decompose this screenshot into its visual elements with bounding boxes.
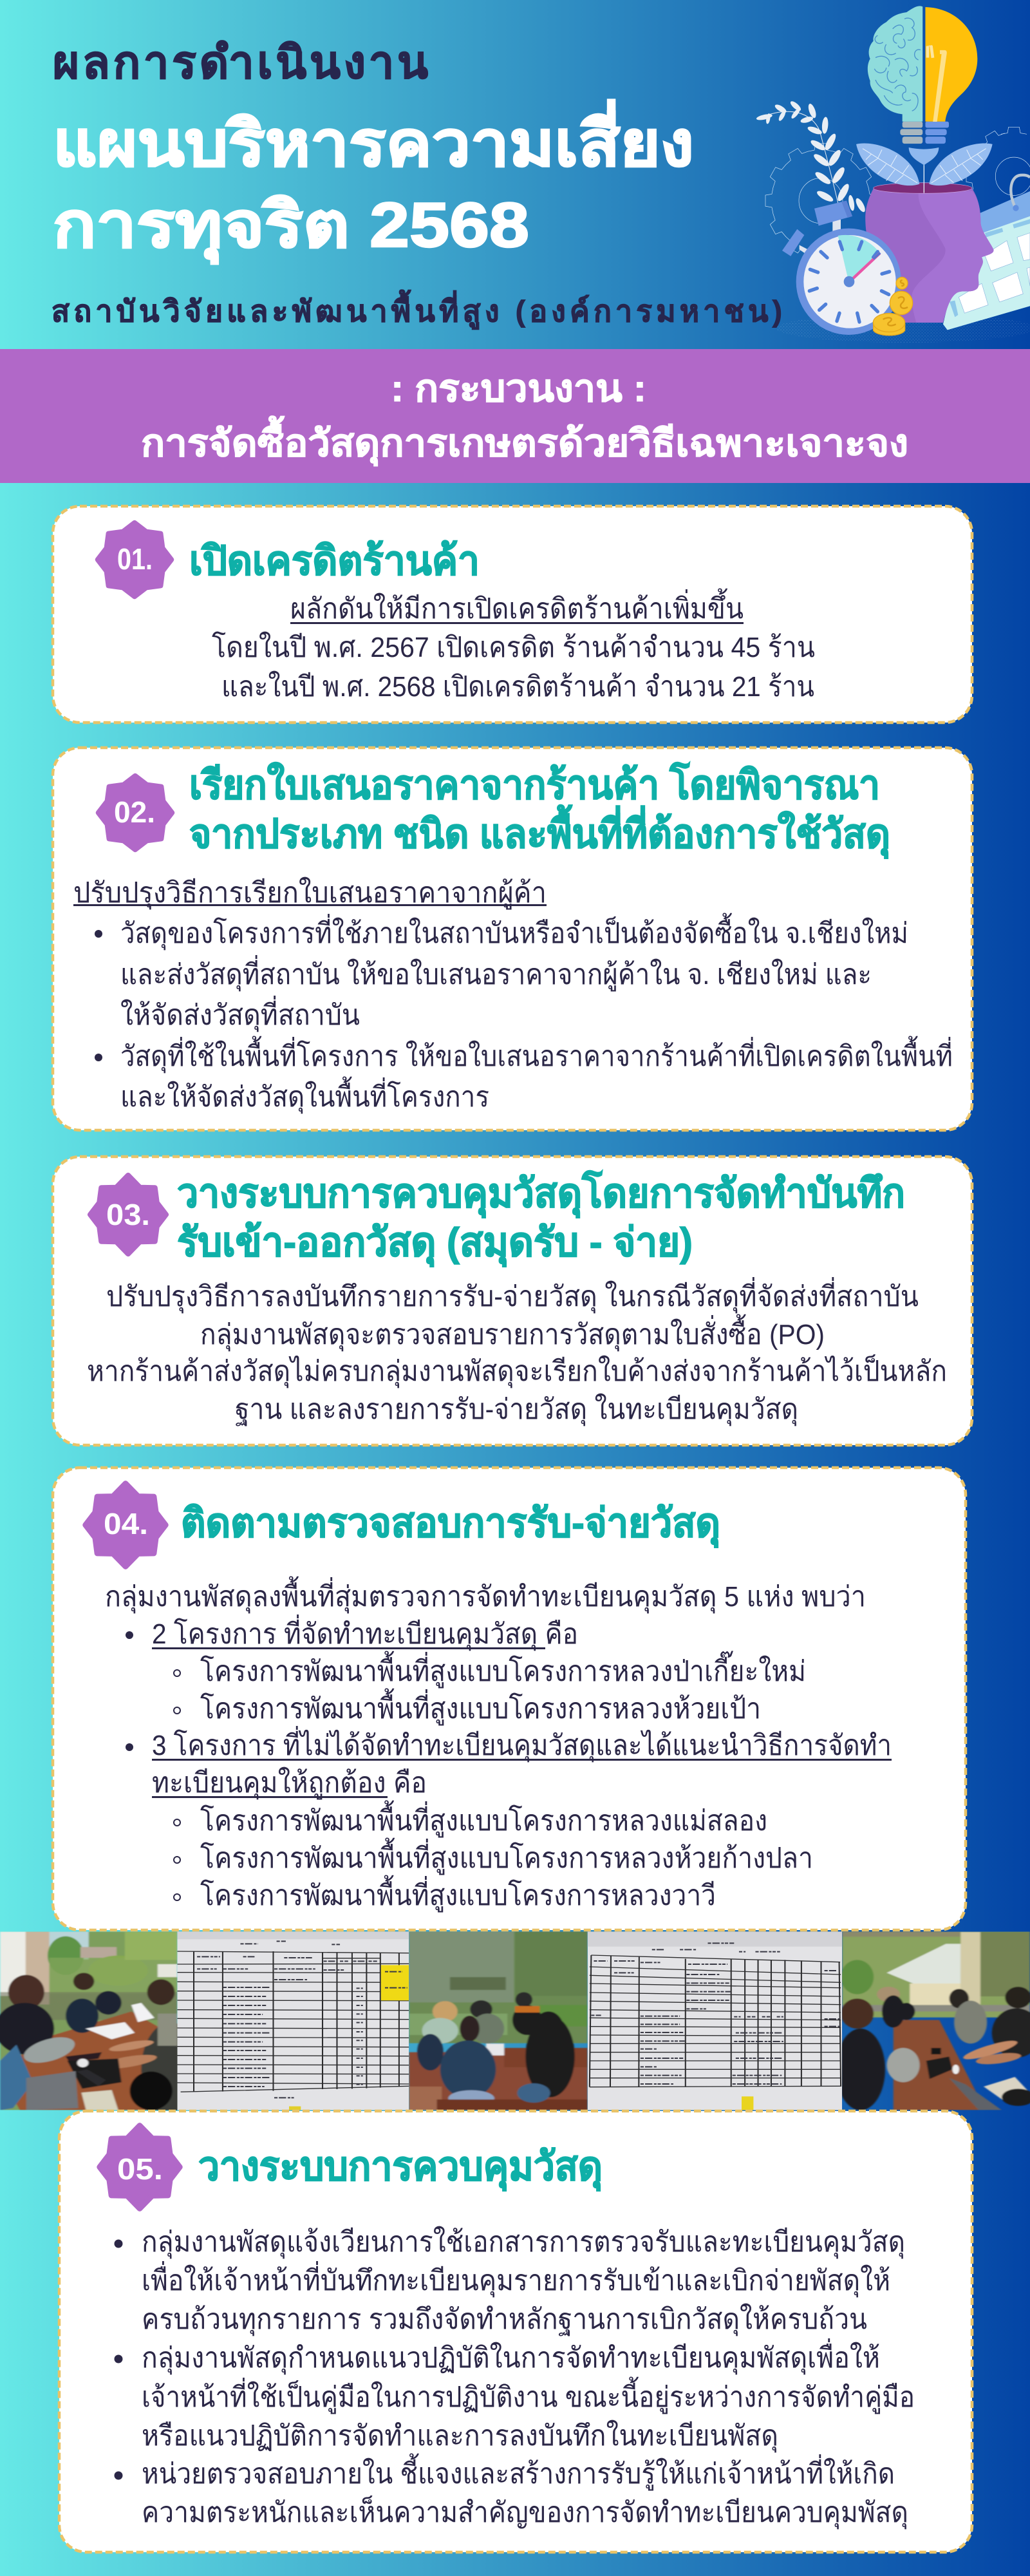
card 02 bullet list: ให้จัดส่งวัสดุที่สถาบัน (120, 995, 360, 1032)
card 02 bullet list: วัสดุของโครงการที่ใช้ภายในสถาบันหรือจำเป็นต้องจัดซื้อใน จ.เชียงใหม่ (120, 913, 908, 951)
card 04 list: 3 projects: โครงการพัฒนาพื้นที่สูงแบบโครงการหลวงวาวี (200, 1875, 716, 1913)
card 03 background (53, 1157, 972, 1445)
icon: leaves (856, 144, 993, 193)
card 02 background (53, 748, 972, 1130)
icon: lightbulb half (925, 7, 977, 122)
panel: 04 (53, 1468, 966, 1930)
photo: handwritten register sheet (178, 1931, 409, 2110)
card 04 list: 3 projects: 3 โครงการ ที่ไม่ได้จัดทำทะเบียนคุมวัสดุและได้แนะนำวิธีการจัดทำ (152, 1725, 892, 1763)
card 05 bullet list: เพื่อให้เจ้าหน้าที่บันทึกทะเบียนคุมรายการรับเข้าและเบิกจ่ายพัสดุให้ (142, 2260, 890, 2298)
badge 02 number: 02. (114, 795, 155, 829)
card 05 bullet list: ความตระหนักและเห็นความสำคัญของการจัดทำทะเบียนควบคุมพัสดุ (142, 2496, 908, 2530)
icon: coins (873, 277, 913, 336)
card 03 body (87, 1276, 947, 1426)
card 02 heading: เรียกใบเสนอราคาจากร้านค้า โดยพิจารณา (189, 761, 880, 808)
card 03 heading: รับเข้า-ออกวัสดุ (สมุดรับ - จ่าย) (177, 1220, 693, 1267)
illustration: brain bulb, head, clock, calendar (756, 6, 1030, 343)
card 01 body (212, 588, 815, 703)
badge 01 (98, 523, 171, 596)
card 01 body: ผลักดันให้มีการเปิดเครดิตร้านค้าเพิ่มขึ้น (290, 588, 744, 625)
card 01 body: และในปี พ.ศ. 2568 เปิดเครดิตร้านค้า จำนวน 21 ร้าน (221, 670, 814, 703)
card 03 body: ปรับปรุงวิธีการลงบันทึกรายการรับ-จ่ายวัสดุ ในกรณีวัสดุที่จัดส่งที่สถาบัน (106, 1276, 919, 1314)
card 01 background (53, 506, 972, 723)
card 02 bullet list: และให้จัดส่งวัสดุในพื้นที่โครงการ (120, 1076, 489, 1114)
icon: left gear (765, 144, 876, 257)
card 05 bullet list (115, 2226, 915, 2530)
panel: 02 (53, 748, 972, 1130)
card 05 bullet list: หน่วยตรวจสอบภายใน ชี้แจงและสร้างการรับรู้ให้แก่เจ้าหน้าที่ให้เกิด (142, 2453, 895, 2491)
band heading: : กระบวนงาน : (391, 368, 646, 410)
card 04 list: 2 projects (126, 1614, 806, 1726)
card 05 background (59, 2111, 972, 2552)
photo strip (0, 1931, 1030, 2117)
icon: right gear (966, 127, 1030, 195)
card 04 list: 3 projects (126, 1725, 892, 1913)
icon: plant branch (756, 100, 867, 213)
band: process title (0, 349, 1030, 483)
badge 04 (86, 1484, 165, 1566)
card 05 bullet list: เจ้าหน้าที่ใช้เป็นคู่มือในการปฏิบัติงาน ขณะนี้อยู่ระหว่างการจัดทำคู่มือ (142, 2376, 915, 2414)
card 01 heading: เปิดเครดิตร้านค้า (189, 539, 480, 583)
card 04 background (53, 1468, 966, 1930)
card 04 list: 2 projects: 2 โครงการ ที่จัดทำทะเบียนคุมวัสดุ คือ (152, 1614, 578, 1651)
card 03 heading (177, 1170, 905, 1267)
photo: meeting at table (0, 1931, 178, 2110)
card 02 bullet list (95, 913, 953, 1114)
icon: bulb screw base (900, 122, 949, 144)
header titles (52, 37, 782, 330)
card 03 body: หากร้านค้าส่งวัสดุไม่ครบกลุ่มงานพัสดุจะเรียกใบค้างส่งจากร้านค้าไว้เป็นหลัก (87, 1354, 947, 1388)
card 04 list: 3 projects: โครงการพัฒนาพื้นที่สูงแบบโครงการหลวงแม่สลอง (200, 1800, 767, 1838)
icon: purple head (865, 183, 993, 323)
card 02 bullet list: และส่งวัสดุที่สถาบัน ให้ขอใบเสนอราคาจากผู้ค้าใน จ. เชียงใหม่ และ (120, 954, 872, 992)
card 04 list: 2 projects: โครงการพัฒนาพื้นที่สูงแบบโครงการหลวงป่าเกี๊ยะใหม่ (200, 1651, 806, 1689)
badge 02 (98, 776, 172, 849)
card 03 body: กลุ่มงานพัสดุจะตรวจสอบรายการวัสดุตามใบสั่งซื้อ (PO) (200, 1314, 825, 1352)
card 04 list: 2 projects: โครงการพัฒนาพื้นที่สูงแบบโครงการหลวงห้วยเป้า (200, 1688, 761, 1726)
photo: handwritten register sheet 2 (588, 1931, 842, 2110)
card 01 body: โดยในปี พ.ศ. 2567 เปิดเครดิต ร้านค้าจำนวน 45 ร้าน (212, 631, 815, 663)
main title line 2: การทุจริต 2568 (53, 189, 529, 265)
icon: calendar (943, 175, 1030, 330)
icon: stopwatch (782, 201, 901, 335)
icon: brain half (868, 6, 925, 146)
photo: meeting under shelter (836, 1931, 1030, 2110)
card 02 subhead: ปรับปรุงวิธีการเรียกใบเสนอราคาจากผู้ค้า (73, 876, 547, 910)
card 05 bullet list: ครบถ้วนทุกรายการ รวมถึงจัดทำหลักฐานการเบิกวัสดุให้ครบถ้วน (142, 2303, 867, 2336)
band background (0, 349, 1030, 483)
card 05 bullet list: กลุ่มงานพัสดุกำหนดแนวปฏิบัติในการจัดทำทะเบียนคุมพัสดุเพื่อให้ (142, 2338, 880, 2375)
band subheading: การจัดซื้อวัสดุการเกษตรด้วยวิธีเฉพาะเจาะจง (141, 416, 908, 467)
badge 01 number: 01. (117, 542, 153, 576)
card 05 bullet list: หรือแนวปฏิบัติการจัดทำและการลงบันทึกในทะเบียนพัสดุ (142, 2420, 778, 2453)
badge 03 number: 03. (106, 1198, 150, 1231)
card 03 heading: วางระบบการควบคุมวัสดุโดยการจัดทำบันทึก (177, 1170, 905, 1218)
card 04 intro: กลุ่มงานพัสดุลงพื้นที่สุ่มตรวจการจัดทำทะเบียนคุมวัสดุ 5 แห่ง พบว่า (105, 1576, 866, 1614)
card 03 body: ฐาน และลงรายการรับ-จ่ายวัสดุ ในทะเบียนคุมวัสดุ (235, 1393, 798, 1426)
panel: 05 (59, 2111, 972, 2552)
main title line 1: แผนบริหารความเสี่ยง (53, 99, 694, 179)
badge 04 number: 04. (104, 1507, 148, 1540)
icon: ground dots (778, 317, 1030, 343)
badge 05 number: 05. (117, 2152, 163, 2186)
card 05 bullet list: กลุ่มงานพัสดุแจ้งเวียนการใช้เอกสารการตรวจรับและทะเบียนคุมวัสดุ (142, 2226, 905, 2259)
card 02 bullet list: วัสดุที่ใช้ในพื้นที่โครงการ ให้ขอใบเสนอราคาจากร้านค้าที่เปิดเครดิตในพื้นที่ (120, 1036, 953, 1074)
organisation subtitle: สถาบันวิจัยและพัฒนาพื้นที่สูง (องค์การมหาชน) (52, 289, 782, 330)
badge 03 (90, 1175, 166, 1254)
badge 05 (100, 2126, 180, 2208)
card 04 list: 3 projects: โครงการพัฒนาพื้นที่สูงแบบโครงการหลวงห้วยก้างปลา (200, 1837, 813, 1875)
card 05 heading: วางระบบการควบคุมวัสดุ (198, 2145, 603, 2191)
title: ผลการดำเนินงาน: ผลการดำเนินงาน (53, 37, 428, 88)
panel: 01 (53, 506, 972, 723)
photo: group on deck (409, 1931, 588, 2110)
card 04 heading: ติดตามตรวจสอบการรับ-จ่ายวัสดุ (181, 1501, 720, 1548)
panel: 03 (53, 1157, 972, 1445)
card 02 heading: จากประเภท ชนิด และพื้นที่ที่ต้องการใช้วัสดุ (189, 804, 890, 858)
card 04 list: 3 projects: ทะเบียนคุมให้ถูกต้อง คือ (152, 1766, 427, 1800)
card 02 heading (189, 761, 890, 858)
